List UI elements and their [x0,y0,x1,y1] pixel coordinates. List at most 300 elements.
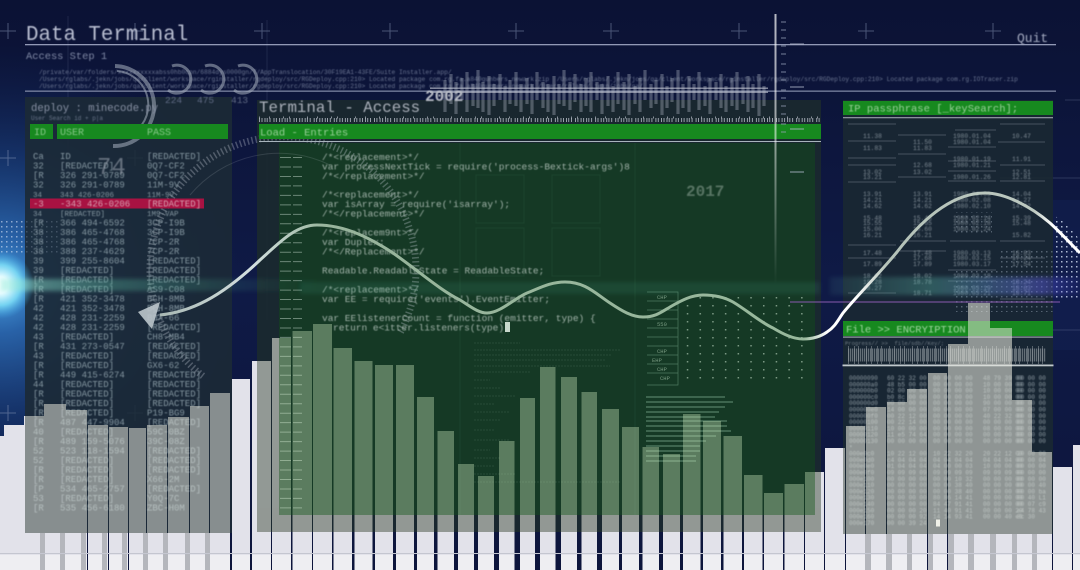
hex dump: 00000110 [849,425,878,432]
user table rows: [R [33,475,44,485]
user table rows: B9X-66 [147,314,179,324]
user table rows: 523 118-1594 [60,446,125,456]
hex dump: 000e0e0 [849,463,875,470]
user table rows: [REDACTED] [60,466,114,476]
user table rows: 326 291-0789 [60,180,125,190]
date table: 11.83 [863,145,882,152]
hex dump: 48 b5 00 00 [887,381,927,388]
date table: 15.48 [913,215,932,222]
user table rows: 343 426-0206 [60,192,115,200]
user table rows: [REDACTED] [60,352,114,362]
date table: 15.60 [913,226,932,233]
hex dump: 00 00 00 [1017,388,1046,395]
date table: 18.71 [913,290,932,297]
hex dump: 60 22 32 00 [887,375,927,382]
user table rows: [R [33,171,44,181]
hex dump: 00 00 04 [1017,457,1046,464]
hex dump: 00 00 00 20 [887,507,927,514]
panel heading: deploy: User Search id + p|a [31,115,103,122]
user table rows: 386 465-4768 [60,228,125,238]
user table rows: GX6-62 [147,361,179,371]
user table rows: 40 [33,428,44,438]
header bar: IP passphrase: IP passphrase [_keySearch]; [848,104,1018,116]
ghost boxes [460,143,635,515]
user table rows: 428 231-2259 [60,323,125,333]
hex dump: 00 00 00 00 [983,482,1023,489]
sine curve with arrow head [138,193,1080,339]
hex dump: 00 00 00 [1017,419,1046,426]
progress label: Progress// >> file/sdb//Key/; [845,340,944,347]
user table rows: 38 [33,238,44,248]
quit label: Quit [1017,31,1048,46]
date table: 1980.03.21 [953,290,991,297]
hex dump: 00 00 00 [1017,476,1046,483]
user table rows: 11M-9V [147,180,180,190]
file paths: /Users/rglabs/.jekn/jobs/qa/client/workspace/rginstaller/rgdeploy/src/RGDeploy.cpp:210> Located package com.rg.fa.a840gunbers-newark /Users/rglabs/.jekn/jobs/qa/ [39,83,643,90]
date table: 1980.01.04 [953,139,991,146]
mini table with CHP labels: CHP [657,348,667,355]
user table rows: 428 231-2259 [60,314,125,324]
user table rows: [REDACTED] [147,266,201,276]
hex dump: 00 00 00 [1017,463,1046,470]
hex dump: 00 00 00 00 [933,438,973,445]
hex dump: 09 09 09 00 [983,470,1023,476]
date table: 1980.03.15 [953,255,991,262]
hex dump: 000e120 [849,488,875,495]
user table rows: 421 352-3478 [60,304,125,314]
user table rows: 487 447-9904 [60,418,125,428]
user table rows: [REDACTED] [60,399,114,409]
user table rows: 42 [33,304,44,314]
date table: 11.50 [913,139,932,146]
date table: 15.00 [863,226,882,233]
code line gutter [286,157,298,515]
date table: 17.54 [1012,261,1031,268]
panel: users table background [25,97,232,533]
hex dump: 10 00 00 00 [983,394,1023,401]
user table rows: [REDACTED] [60,276,114,286]
date table: 15.65 [913,220,932,227]
user table rows: [R [33,390,44,400]
bottom band on bars [0,555,1080,570]
user table rows: [REDACTED] [147,276,201,286]
user table rows: [R [33,294,44,304]
hex dump: 00 00 00 00 [983,495,1023,502]
hex dump: 00 00 38 40 [933,482,973,489]
hex dump: 00 00 00 00 [933,425,973,432]
user table rows [33,152,201,514]
hex dump: 00 00 00 00 [887,501,927,508]
user table rows: [REDACTED] [60,211,105,219]
user table rows: 535 456-6180 [60,504,125,514]
code block: /*<replacement>*/ [322,190,419,200]
user table rows: [REDACTED] [147,352,201,362]
hex dump: 000000a0 [849,381,878,388]
code block: var isArray = require('isarray'); [322,199,510,210]
hex dump: 00 00 00 00 [983,488,1023,495]
top rule lines [25,44,1056,92]
user table rows: ID [60,152,71,162]
date table: 1980.01.21 [953,162,991,169]
date table: 11.38 [863,133,882,140]
hex dump: 00000100 [849,419,878,426]
user table rows: [REDACTED] [147,484,201,494]
top waveform [445,70,764,116]
table header: USER [60,128,84,139]
header bar: file encryption: File >> ENCRYIPTION [846,324,966,336]
user table rows: 0Q7-CF2 [147,162,185,172]
date table: 17.48 [863,250,882,257]
date table: 14.27 [1012,197,1031,204]
hex dump: 00 00 00 00 [933,419,973,426]
text cursor [505,322,510,332]
heading: terminal access: Terminal - Access [259,99,420,117]
code block: /*</Replacement>*/ [322,246,425,258]
date table: 17.89 [913,261,932,268]
user table rows: [R [33,218,44,228]
hex dump [849,375,1046,527]
user table rows: [REDACTED] [147,256,201,266]
hex dump: 90 00 00 00 [983,400,1023,407]
hex dump: 11 e5 74 64 [887,432,927,439]
large dashed ring [150,137,416,376]
hex dump: 09 09 09 09 [933,470,973,476]
user table rows: [REDACTED] [147,342,201,352]
user table rows: [REDACTED] [147,152,201,162]
hex dump: 04 04 04 00 [983,457,1023,464]
hex dump: 00000130 [849,438,878,445]
user table rows: [REDACTED] [147,323,201,333]
hex dump: 00 00 00 00 [933,406,973,414]
hex dump: 04 00 00 03 [933,463,973,470]
user table rows: 52 [33,456,44,466]
hex dump: 00 00 10 32 [933,476,973,483]
date table: 1980.01.04 [953,133,991,140]
user table rows: 3CP-I9B [147,228,185,238]
progress waveform [843,355,1053,366]
user table rows: [REDACTED] [147,418,201,428]
hex dump: 00 07 c9 [1017,501,1046,508]
subtitle: Access Step 1 [26,51,107,63]
date table: 14.21 [863,197,882,204]
hex dump: 00 00 00 00 [933,394,973,401]
user table rows: BCH-8MB [147,304,185,314]
hex dump: 00 00 40 [1017,482,1046,489]
user table rows: 43 [33,332,44,342]
date table: 1980.02.18 [953,220,991,227]
date table: 11.83 [913,145,932,152]
user table rows: [REDACTED] [147,399,201,409]
date table: 18.02 [863,273,882,280]
hex dump: 00 00 00 [1017,470,1046,476]
dial gauges with numbers: 224 [165,95,182,106]
date table: 16.21 [863,232,882,239]
hex dump: 00 00 00 00 [933,388,973,395]
user table rows: [REDACTED] [60,408,114,418]
mini table with CHP labels: EHP [652,357,662,364]
date table: 14.21 [913,197,932,204]
hex dump: 000e150 [849,507,875,514]
hex dump: 00 22 14 00 [887,419,927,426]
user table rows: Y0Q-7C [147,494,180,504]
date table: 18.63 [1012,285,1031,292]
date table: 1980.01.26 [953,174,991,181]
user table rows: -343 426-0206 [60,200,130,210]
user table rows: [R [33,361,44,371]
hex dump: 00 00 00 [1017,394,1046,401]
user table rows: 43 [33,352,44,362]
user table rows: 534 465-2757 [60,484,125,494]
date table: 15.48 [1012,220,1031,227]
user table rows: [REDACTED] [60,361,114,371]
user table rows: 52 [33,446,44,456]
user table rows: 32 [33,180,44,190]
user table rows: 449 415-6274 [60,370,125,380]
date table: 18.02 [913,273,932,280]
hex dump: 08 00 00 00 [983,425,1023,432]
date table: 16.83 [1012,250,1031,257]
user table rows: 38 [33,247,44,257]
date table: 13.91 [863,191,882,198]
user table rows: 39 [33,266,44,276]
hex dump: 00 00 00 00 [983,501,1023,508]
hex dump: 00 00 00 92 [887,514,927,521]
code block: /*<replacem9nt>*/ [322,228,419,238]
date table [863,133,1031,297]
date table: 1980.02.03 [953,191,991,198]
hex dump: 000000d0 [849,400,878,407]
hex dump: 00 00 00 00 [983,476,1023,483]
user table rows: 326 291-0789 [60,171,125,181]
hex dump: 000000b0 [849,388,878,395]
hex dump: 00 40 L1 [1017,495,1046,502]
user table rows: 39C-08Z [147,437,185,447]
user table rows: [REDACTED] [60,380,114,390]
hex dump: 00 00 00 00 [887,495,927,502]
hex dump: 00 00 ba [1017,488,1046,495]
user table rows: 366 494-6592 [60,218,125,228]
date table: 17.68 [913,255,932,262]
timeline rails [430,88,768,93]
user table rows: 421 352-3478 [60,294,125,304]
hex dump: 09 09 09 09 [887,470,927,476]
mini table with CHP labels: CHP [660,375,670,382]
date table: 17.89 [863,261,882,268]
date table: 1980.03.17 [953,261,991,268]
hex dump: 000e0d0 [849,457,875,464]
hex dump: 00 00 00 00 [933,400,973,407]
hex dump: e4 78 43 [1017,507,1046,514]
date table: 1980.01.19 [953,156,991,163]
user table rows: [R [33,342,44,352]
user table rows: 1M9-VAP [147,211,179,219]
date table rules [848,124,1045,299]
horizontal stripe chart [646,397,733,461]
date table: 17.48 [913,250,932,257]
year label 2002: 2002 [425,88,463,106]
file paths [39,69,1018,90]
code block: /*<replacement>*/ [322,152,419,163]
hex dump: 02 00 00 00 [887,388,927,395]
user table rows: [REDACTED] [147,370,201,380]
hex dump: 80 86 14 41 [933,495,973,502]
date table: 13.91 [913,191,932,198]
user table rows: CH8-MB4 [147,332,185,342]
user table rows: P19-BG9 [147,408,185,418]
date table: 13.21 [863,174,882,181]
hex dump: 00 00 00 [1017,438,1046,445]
date table: 18.78 [913,279,932,286]
user table rows: [REDACTED] [60,494,114,504]
hex dump: 40 22 32 00 [983,413,1023,420]
table header: PASS [147,128,171,139]
mini table with CHP labels: 550 [657,321,667,328]
date table: 14.42 [1012,203,1031,210]
user table rows: [REDACTED] [147,456,201,466]
hex dump: 20 22 12 00 [983,451,1023,458]
white bar chart [0,303,1080,570]
date table: 14.04 [1012,191,1031,198]
lens flare [0,250,1080,320]
hex dump: 000000c0 [849,394,878,401]
hex dump: 00 00 00 00 [933,381,973,388]
hex dump: 000e160 [849,514,875,521]
hex dump: 8c 30 [1017,514,1035,521]
hex dump: 00 00 00 [1017,432,1046,439]
date table: 12.51 [1012,169,1031,176]
hex dump: 000e0f0 [849,470,875,476]
date table: 15.39 [1012,215,1031,222]
big number 74: 74 [97,155,126,182]
mini table with CHP labels [647,292,678,385]
hex dump: 10 22 32 20 [933,451,973,458]
date table: 1980.02.24 [953,226,991,233]
user table rows: [REDACTED] [147,390,201,400]
highlighted row [30,198,204,208]
date table: 14.62 [913,203,932,210]
hex dump: 10 00 00 00 [983,388,1023,395]
user table rows: 39 [33,256,44,266]
date table: 1980.02.14 [953,215,991,222]
user table rows: -3 [33,200,44,210]
user table rows: 53 [33,494,44,504]
hex dump: 00 00 00 00 [887,482,927,489]
user table rows: ZBC-H0M [147,504,185,514]
table header: ID [34,128,46,139]
code block: var EE = require('events').EventEmitter; [322,294,550,305]
header bar: IP passphrase [843,101,1053,118]
user table rows: 34 [33,192,43,200]
hex dump: 00 00 00 00 [933,375,973,382]
hex dump: 000e170 [849,520,875,527]
code block: /*</replacement>*/ [322,171,425,182]
hex dump: 000e130 [849,495,875,502]
date table: 17.24 [1012,255,1031,262]
hex dump: 00 00 00 [1017,400,1046,407]
panel: terminal access inner [279,143,815,515]
user table rows: [REDACTED] [147,446,201,456]
user table rows: [REDACTED] [60,285,114,295]
user table rows: 59C-0BZ [147,428,185,438]
mini table with CHP labels: CHP [657,366,667,373]
code block: return e<itter.listeners(type) [333,322,504,334]
hex dump: 00 00 00 00 [983,419,1023,426]
user table rows: [R [33,408,44,418]
date table: 18.71 [1012,290,1031,297]
user table rows: [REDACTED] [147,200,201,210]
user table rows: 44 [33,380,44,390]
hex dump: 01 04 04 04 [887,463,927,470]
dot map left [0,218,60,253]
hex dump: 000e0c0 [849,451,875,458]
dot matrix [680,295,805,385]
hex dump: 00 00 00 00 [887,400,927,407]
hex dump: 14 00 00 00 [887,406,927,414]
header bar: load entries [259,124,821,142]
header bar: load entries: Load - Entries [260,128,348,140]
date table: 15.48 [863,215,882,222]
bars over panels [0,303,1080,570]
hex dump: b0 8c 00 00 [887,394,927,401]
hex dump: * [849,444,853,451]
hex dump: 00 00 00 00 [933,432,973,439]
hex dump: 00 00 00 00 [983,432,1023,439]
table header [30,124,228,139]
user table rows: [R [33,399,44,409]
user table rows: 7CP-2R [147,238,180,248]
hex dump: 11 40 91 41 [933,507,973,514]
date table: 1980.03.19 [953,285,991,292]
year label 2017: 2017 [686,183,724,201]
grey column gaps at the base of side charts [40,533,1037,570]
user table rows: 42 [33,314,44,324]
file paths: /private/var/folders/xxxxxxxxxxabss0hb0cpn/6884dys0000gn/T/AppTranslocation/30F19EA1-43FE/Suite Installer.app/ [39,69,452,76]
user table rows: AS9-C08 [147,285,185,295]
hex dump: 04 04 04 04 [933,457,973,464]
date table: 14.62 [863,203,882,210]
date table: 16.21 [913,232,932,239]
user table rows: [REDACTED] [60,475,114,485]
user table rows: [R [33,504,44,514]
user table rows: [P [33,484,44,494]
hex dump: 07 00 00 00 [983,406,1023,414]
dot map right [955,212,1080,312]
date table: 15.55 [863,220,882,227]
code block [322,152,630,334]
user table rows: 42 [33,323,44,333]
hex dump: 00 00 00 20 [983,507,1023,514]
hex dump: 10 00 00 00 [887,425,927,432]
user table rows: 34 [33,211,43,219]
user table rows: 7CP-2R [147,247,180,257]
user table rows: BCH-8MB [147,294,185,304]
hex dump: 00 00 38 40 [933,488,973,495]
date table: 15.82 [1012,232,1031,239]
hex dump: 00 00 00 00 [983,438,1023,445]
user table rows: [R [33,370,44,380]
hex dump: 000e100 [849,476,875,483]
code block: /*</replacement>*/ [322,208,425,220]
user table rows: [REDACTED] [60,390,114,400]
code block: var Duplex; [322,237,385,248]
user table rows: [REDACTED] [60,162,114,172]
date table: 1980.03.13 [953,250,991,257]
user table rows: [R [33,418,44,428]
hex dump: 000e110 [849,482,875,489]
user table rows: 0Q7-CF2 [147,171,185,181]
user table rows: X66-2M [147,475,179,485]
hex dump: 00000120 [849,432,878,439]
